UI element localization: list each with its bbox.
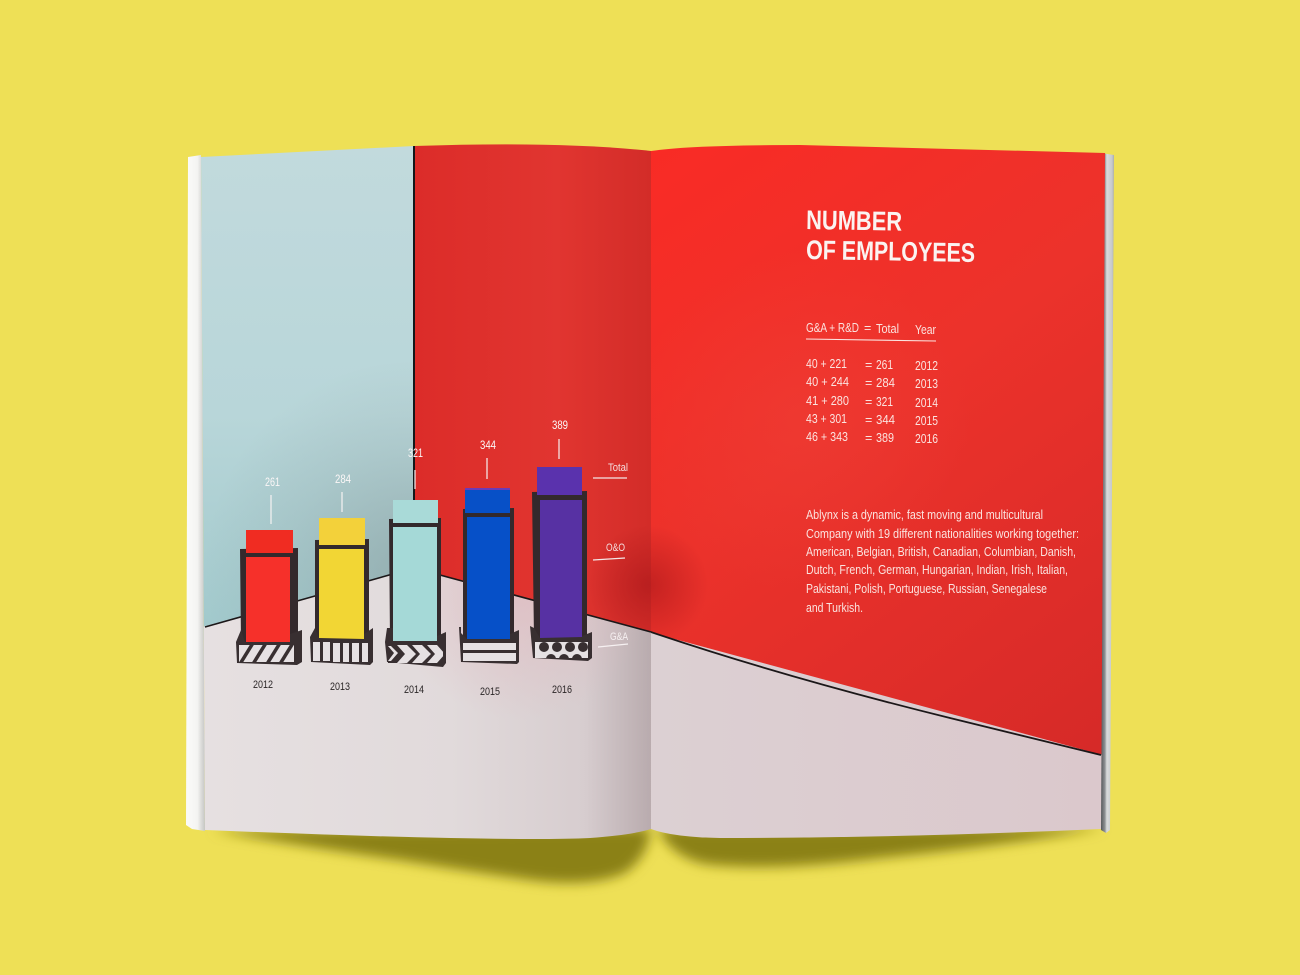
row 2012 bbox=[806, 357, 938, 373]
title: NUMBER bbox=[806, 205, 902, 237]
legend: G&amp;A: G&A bbox=[610, 631, 629, 643]
body paragraph bbox=[806, 508, 1079, 615]
year labels: 2013 bbox=[330, 681, 350, 693]
row 2013: = bbox=[865, 376, 872, 390]
body paragraph: Ablynx is a dynamic, fast moving and multicultural bbox=[806, 508, 1043, 522]
legend: G&amp;A bbox=[598, 631, 629, 647]
row 2014: 41 + 280 bbox=[806, 394, 849, 408]
value labels: 389 bbox=[552, 420, 568, 432]
row 2015: = bbox=[865, 413, 872, 427]
red wall right page bbox=[645, 135, 1110, 760]
page stack right edge bbox=[1101, 153, 1114, 833]
row 2013: 40 + 244 bbox=[806, 375, 849, 389]
row 2015: 43 + 301 bbox=[806, 412, 847, 426]
row 2012: 261 bbox=[876, 358, 893, 372]
year labels: 2015 bbox=[480, 686, 500, 698]
table header: Year bbox=[915, 323, 936, 337]
body paragraph: and Turkish. bbox=[806, 601, 863, 615]
data table bbox=[806, 357, 938, 446]
row 2013: 2013 bbox=[915, 377, 938, 391]
body paragraph: Company with 19 different nationalities working together: bbox=[806, 527, 1079, 541]
floor right page bbox=[645, 631, 1110, 850]
table header: G&A + R&D bbox=[806, 321, 859, 335]
row 2015 bbox=[806, 412, 938, 428]
value labels: 344 bbox=[480, 440, 497, 452]
row 2013 bbox=[806, 375, 938, 391]
right page photograph bbox=[630, 135, 1110, 850]
row 2016: 46 + 343 bbox=[806, 430, 848, 444]
row 2016: 2016 bbox=[915, 432, 938, 446]
bar 2012 bbox=[236, 530, 302, 665]
table header bbox=[806, 321, 936, 341]
row 2012: 2012 bbox=[915, 359, 938, 373]
value labels: 284 bbox=[335, 474, 352, 486]
row 2016: = bbox=[865, 431, 872, 445]
year labels bbox=[253, 679, 572, 698]
table header: = bbox=[864, 321, 871, 335]
body paragraph: Pakistani, Polish, Portuguese, Russian, Senegalese bbox=[806, 582, 1047, 596]
row 2014: = bbox=[865, 395, 872, 409]
page stack left edge bbox=[186, 155, 205, 831]
row 2015: 2015 bbox=[915, 414, 938, 428]
legend: O&amp;O: O&O bbox=[606, 542, 625, 554]
row 2014 bbox=[806, 394, 938, 410]
teal wall bbox=[195, 140, 415, 640]
bar 2016 bbox=[530, 467, 592, 664]
left page photograph bbox=[195, 135, 660, 850]
row 2015: 344 bbox=[876, 413, 895, 427]
bar 2013 bbox=[310, 518, 373, 665]
title: OF EMPLOYEES bbox=[806, 235, 975, 268]
value labels: 261 bbox=[265, 477, 280, 489]
year labels: 2016 bbox=[552, 684, 572, 696]
floor left page bbox=[204, 576, 651, 839]
legend: O&amp;O bbox=[593, 542, 625, 560]
row 2014: 321 bbox=[876, 395, 893, 409]
row 2013: 284 bbox=[876, 376, 895, 390]
value labels bbox=[265, 420, 568, 489]
value leader lines bbox=[271, 439, 559, 524]
body paragraph: American, Belgian, British, Canadian, Columbian, Danish, bbox=[806, 545, 1076, 559]
red wall left page bbox=[414, 135, 654, 645]
row 2012: = bbox=[865, 358, 872, 372]
row 2016 bbox=[806, 430, 938, 446]
legend: total bbox=[593, 462, 628, 478]
value labels: 321 bbox=[408, 448, 423, 460]
magazine shadow bbox=[212, 828, 1104, 883]
magazine spread infographic bbox=[186, 144, 1114, 891]
row 2016: 389 bbox=[876, 431, 894, 445]
table header: Total bbox=[876, 322, 899, 336]
body paragraph: Dutch, French, German, Hungarian, Indian, Irish, Italian, bbox=[806, 563, 1068, 577]
title bbox=[806, 205, 975, 268]
year labels: 2012 bbox=[253, 679, 273, 691]
row 2012: 40 + 221 bbox=[806, 357, 847, 371]
row 2014: 2014 bbox=[915, 396, 938, 410]
wall corner line bbox=[413, 146, 415, 500]
bar 2015 bbox=[459, 488, 519, 664]
chart: employees 2012-2016 bbox=[236, 420, 629, 698]
legend: total: Total bbox=[608, 462, 628, 474]
bar 2014 bbox=[385, 500, 446, 667]
year labels: 2014 bbox=[404, 684, 424, 696]
